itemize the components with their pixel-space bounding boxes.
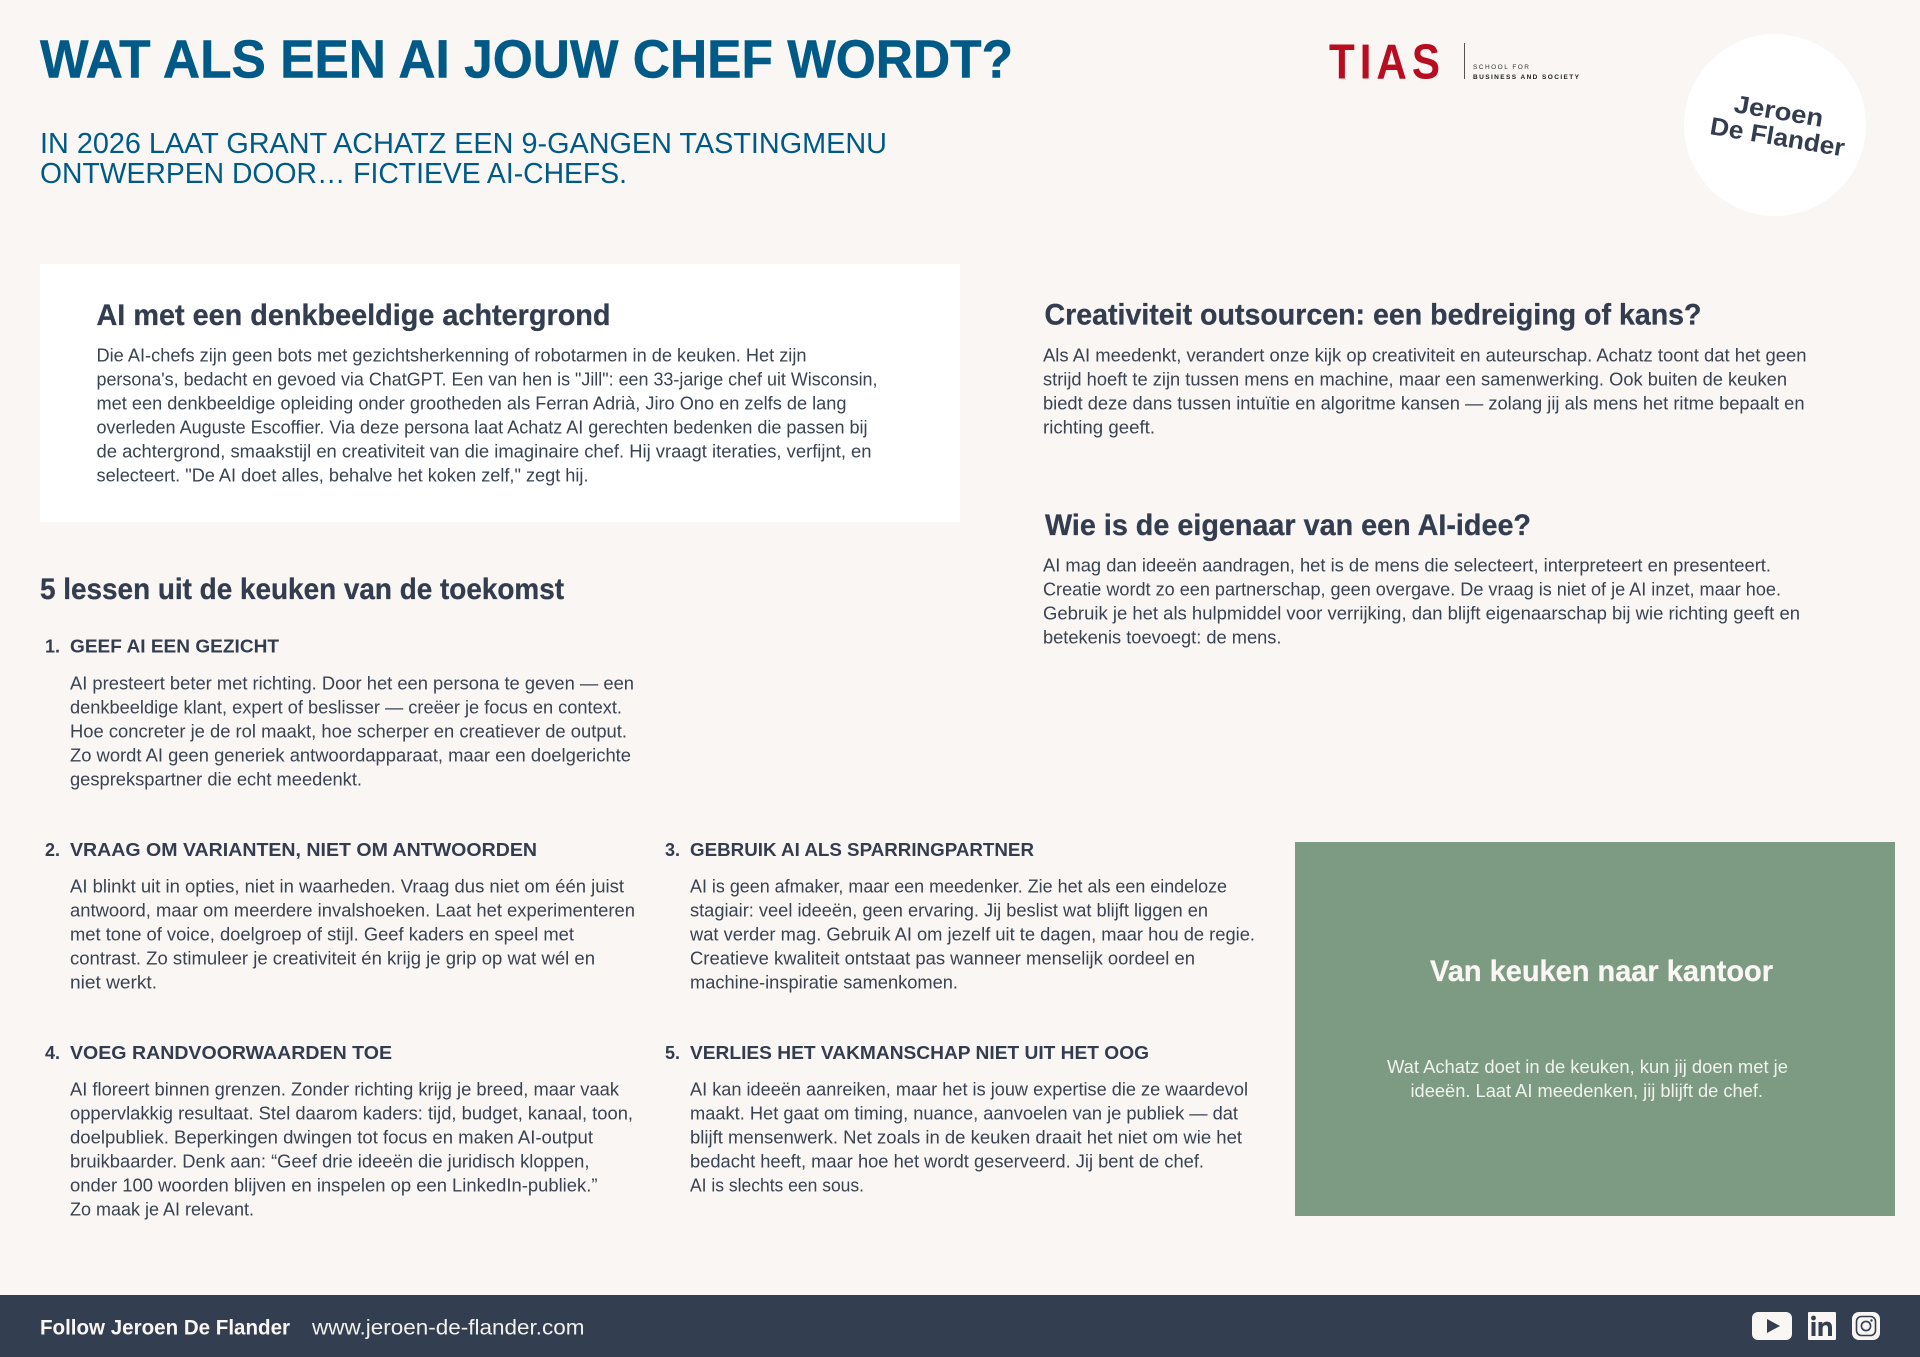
lesson 3: Creatieve kwaliteit ontstaat pas wanneer menselijk oordeel en (690, 948, 1195, 968)
logo: TIAS (1329, 35, 1580, 89)
lesson 5: AI kan ideeën aanreiken, maar het is jouw expertise die ze waardevol (690, 1080, 1248, 1100)
lesson 2: antwoord, maar om meerdere invalshoeken. Laat het experimenteren (70, 900, 635, 920)
body text: Als AI meedenkt, verandert onze kijk op creativiteit en auteurschap. Achatz toont dat het geen (1043, 346, 1806, 366)
lesson 2: AI blinkt uit in opties, niet in waarheden. Vraag dus niet om één juist (70, 876, 624, 896)
callout: Van keuken naar kantoor (1295, 842, 1895, 1216)
lesson 1: Zo wordt AI geen generiek antwoordapparaat, maar een doelgerichte (70, 746, 631, 766)
lesson 5: blijft mensenwerk. Net zoals in de keuken draait het niet om wie het (690, 1128, 1242, 1148)
lesson 2: VRAAG OM VARIANTEN, NIET OM ANTWOORDEN (70, 840, 537, 860)
icon: Instagram (1852, 1312, 1880, 1340)
lesson 3: 3. (665, 840, 680, 860)
lesson 3: machine-inspiratie samenkomen. (690, 972, 958, 992)
lesson 1: 1. (45, 636, 60, 656)
footer: Follow Jeroen De Flander (40, 1316, 291, 1340)
heading: Wie is de eigenaar van een AI-idee? (1045, 509, 1531, 542)
lesson 3: stagiair: veel ideeën, geen ervaring. Jij beslist wat blijft liggen en (690, 900, 1208, 920)
badge: Jeroen De Flander: De Flander (1708, 112, 1847, 162)
lesson 1: denkbeeldige klant, expert of beslisser — creëer je focus en context. (70, 698, 622, 718)
body text: persona's, bedacht en gevoed via ChatGPT. Een van hen is "Jill": een 33-jarige chef uit Wisconsin, (96, 370, 878, 390)
lesson 1: AI presteert beter met richting. Door het een persona te geven — een (70, 674, 634, 694)
lesson 4 (45, 1043, 633, 1220)
lesson 5: maakt. Het gaat om timing, nuance, aanvoelen van je publiek — dat (690, 1104, 1238, 1124)
lesson 2: 2. (45, 840, 60, 860)
lesson 4: oppervlakkig resultaat. Stel daarom kaders: tijd, budget, kanaal, toon, (70, 1104, 633, 1124)
heading: AI met een denkbeeldige achtergrond (96, 299, 610, 332)
lesson 2: contrast. Zo stimuleer je creativiteit én krijg je grip op wat wél en (70, 948, 595, 968)
subtitle: ONTWERPEN DOOR… FICTIEVE AI-CHEFS. (40, 158, 627, 190)
body text: de achtergrond, smaakstijl en creativiteit van die imaginaire chef. Hij vraagt iteraties, verfijnt, en (96, 442, 872, 462)
footer (0, 1295, 1920, 1357)
logo: TIAS: BUSINESS AND SOCIETY (1473, 74, 1580, 81)
lesson 4: Zo maak je AI relevant. (70, 1200, 254, 1220)
lesson 2: niet werkt. (70, 972, 157, 992)
panel: Wie is de eigenaar (1043, 509, 1800, 648)
lesson 1 (45, 636, 634, 790)
body text: strijd hoeft te zijn tussen mens en machine, maar een samenwerking. Ook buiten de keuken (1043, 370, 1787, 390)
lesson 5: VERLIES HET VAKMANSCHAP NIET UIT HET OOG (690, 1043, 1149, 1063)
lesson 3: wat verder mag. Gebruik AI om jezelf uit te dagen, maar hou de regie. (689, 924, 1255, 944)
body text: selecteert. "De AI doet alles, behalve het koken zelf," zegt hij. (96, 466, 588, 486)
heading: 5 lessen: 5 lessen uit de keuken van de toekomst (40, 573, 564, 606)
lesson 5 (665, 1043, 1248, 1196)
lesson 1: gesprekspartner die echt meedenkt. (70, 770, 362, 790)
body text: Die AI-chefs zijn geen bots met gezichtsherkenning of robotarmen in de keuken. Het zijn (96, 346, 806, 366)
body text: met een denkbeeldige opleiding onder grootheden als Ferran Adrià, Jiro Ono en zelfs de lang (96, 394, 846, 414)
badge: Jeroen De Flander (1684, 34, 1866, 216)
body text: Creatie wordt zo een partnerschap, geen overgave. De vraag is niet of je AI inzet, maar hoe. (1043, 580, 1781, 600)
title: WAT ALS EEN AI JOUW CHEF WORDT? (40, 30, 1013, 90)
heading: Creativiteit outsourcen: een bedreiging of kans? (1044, 298, 1702, 332)
lesson 1: Hoe concreter je de rol maakt, hoe scherper en creatiever de output. (70, 722, 627, 742)
body text: biedt deze dans tussen intuïtie en algoritme kansen — zolang jij als mens het ritme bepaalt en (1043, 394, 1804, 414)
lesson 2: met tone of voice, doelgroep of stijl. Geef kaders en speel met (70, 924, 574, 944)
lesson 3: GEBRUIK AI ALS SPARRINGPARTNER (690, 840, 1034, 860)
lesson 4: 4. (45, 1043, 60, 1063)
icon: YouTube (1752, 1312, 1792, 1340)
lesson 3: AI is geen afmaker, maar een meedenker. Zie het als een eindeloze (690, 876, 1227, 896)
lesson 5: AI is slechts een sous. (690, 1176, 864, 1196)
body text: overleden Auguste Escoffier. Via deze persona laat Achatz AI gerechten bedenken die passen bij (96, 418, 868, 438)
body text: Gebruik je het als hulpmiddel voor verrijking, dan blijft eigenaarschap bij wie richting geeft en (1043, 604, 1800, 624)
lesson 4: AI floreert binnen grenzen. Zonder richting krijg je breed, maar vaak (70, 1080, 620, 1100)
body text (1043, 346, 1806, 438)
panel: Creativiteit outsourcen (1043, 298, 1806, 438)
logo: TIAS: TIAS (1329, 35, 1440, 89)
callout: Van keuken naar kantoor: ideeën. Laat AI meedenken, jij blijft de chef. (1410, 1081, 1763, 1101)
lesson 4: onder 100 woorden blijven en inspelen op een LinkedIn-publiek.” (70, 1176, 598, 1196)
callout: Van keuken naar kantoor: Van keuken naar kantoor (1430, 955, 1773, 988)
lesson 4: doelpubliek. Beperkingen dwingen tot focus en maken AI-output (70, 1128, 593, 1148)
body text (1043, 556, 1800, 648)
lesson 5: bedacht heeft, maar hoe het wordt geserveerd. Jij bent de chef. (690, 1152, 1204, 1172)
subtitle: IN 2026 LAAT GRANT ACHATZ EEN 9-GANGEN TASTINGMENU (40, 128, 887, 160)
lesson 2 (45, 840, 635, 992)
panel: AI met een denkbeeldige achtergrond (40, 264, 960, 522)
lesson 1: GEEF AI EEN GEZICHT (70, 636, 279, 656)
lesson 4: VOEG RANDVOORWAARDEN TOE (70, 1043, 392, 1063)
logo: TIAS: SCHOOL FOR (1473, 64, 1529, 71)
body text: betekenis toevoegt: de mens. (1043, 628, 1282, 648)
body text (96, 346, 878, 486)
badge: Jeroen De Flander: Jeroen (1732, 90, 1825, 133)
subtitle (40, 128, 887, 190)
body text: richting geeft. (1043, 418, 1155, 438)
body text: AI mag dan ideeën aandragen, het is de mens die selecteert, interpreteert en presenteert. (1043, 556, 1771, 576)
lesson 3 (665, 840, 1255, 992)
lesson 5: 5. (665, 1043, 680, 1063)
lesson 4: bruikbaarder. Denk aan: “Geef drie ideeën die juridisch kloppen, (70, 1152, 590, 1172)
icon: LinkedIn (1808, 1312, 1836, 1340)
callout: Van keuken naar kantoor: Wat Achatz doet in de keuken, kun jij doen met je (1387, 1057, 1788, 1077)
footer: www.jeroen-de-flander.com (311, 1316, 584, 1340)
